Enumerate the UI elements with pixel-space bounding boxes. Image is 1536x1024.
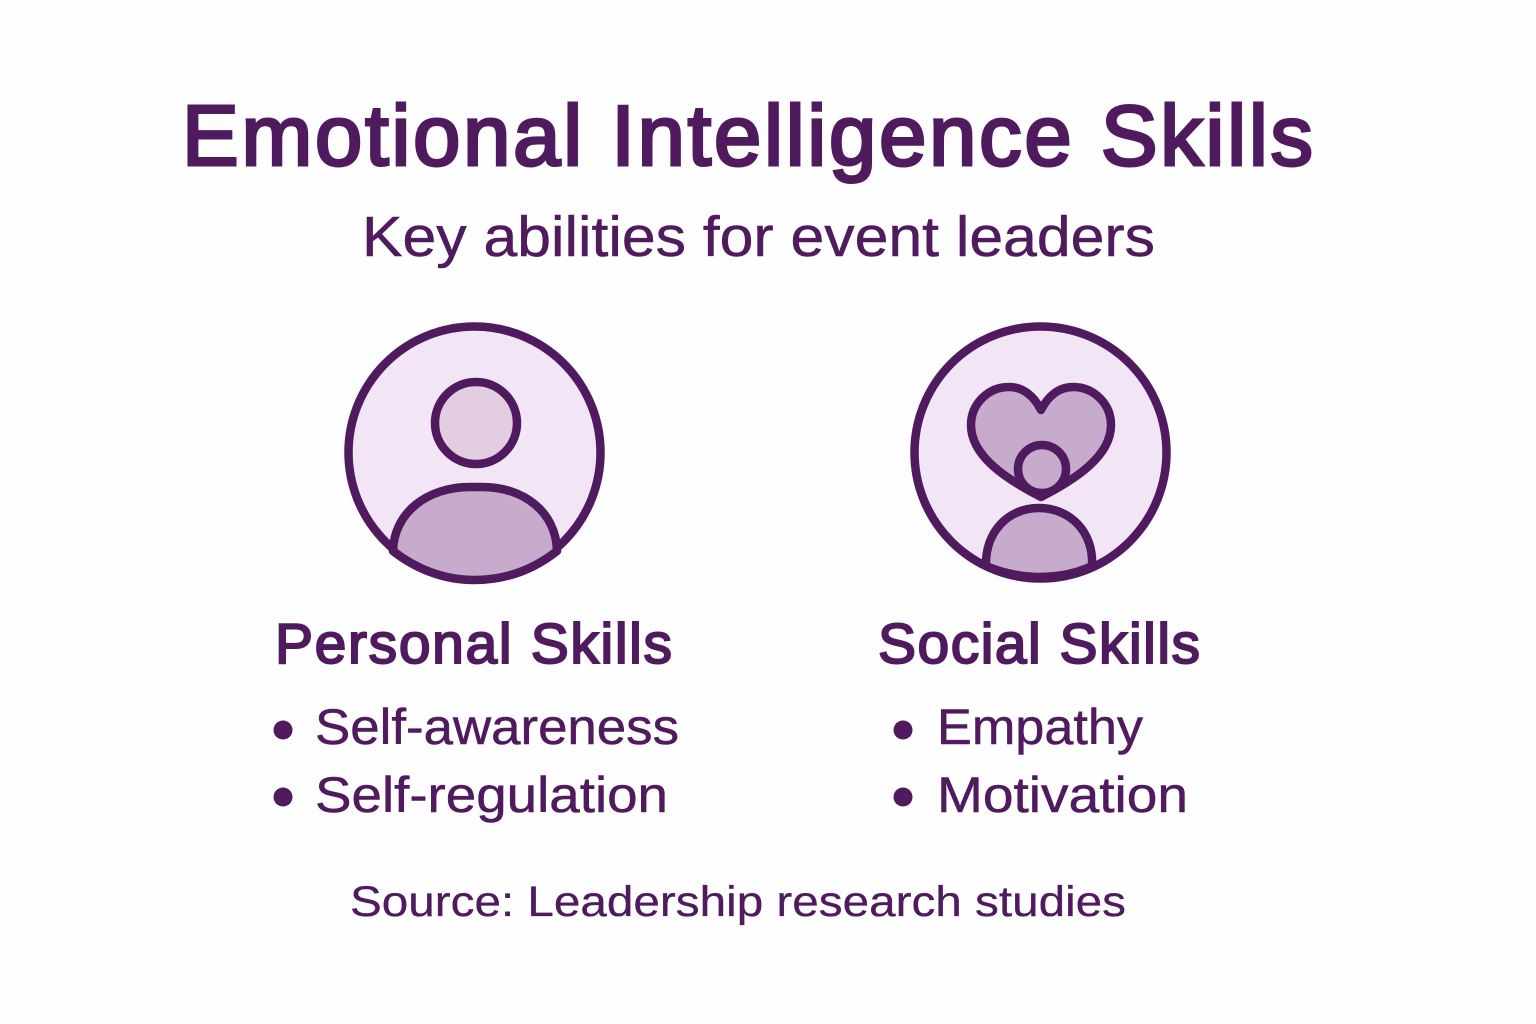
title: Emotional Intelligence Skills (182, 89, 1313, 184)
icon: heart and person (914, 326, 1166, 578)
heading: social skills: Social Skills (878, 612, 1200, 676)
list: personal skills (274, 699, 679, 823)
subtitle: Key abilities for event leaders (362, 205, 1155, 269)
list: personal skills: Self-regulation (315, 767, 668, 823)
list: social skills: Motivation (937, 767, 1188, 823)
icon: person (348, 326, 600, 580)
list: social skills: Empathy (937, 699, 1143, 755)
list: social skills (894, 699, 1188, 823)
heading: personal skills: Personal Skills (275, 612, 672, 676)
list: personal skills: Self-awareness (315, 699, 679, 755)
source note: Source: Leadership research studies (350, 878, 1126, 926)
